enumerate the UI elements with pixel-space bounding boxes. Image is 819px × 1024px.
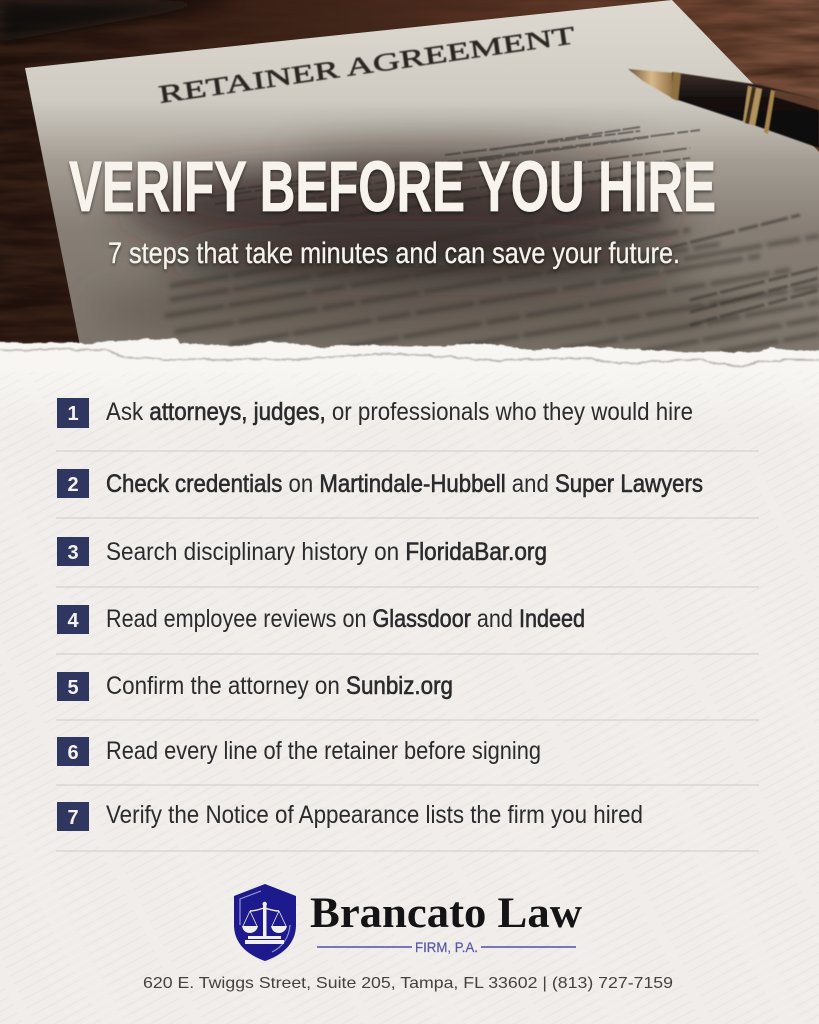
step 5: Confirm the attorney on Sunbiz.org (106, 672, 453, 700)
step 7: Verify the Notice of Appearance lists the firm you hired (106, 801, 643, 829)
wooden desk background (0, 0, 819, 356)
step 6: Read every line of the retainer before signing (106, 737, 541, 765)
step 1: Ask attorneys, judges, or professionals who they would hire (106, 398, 693, 426)
document text lines (165, 127, 819, 352)
torn paper edge (0, 338, 819, 372)
step 7: 7 (67, 807, 79, 829)
panel: lower paper with steps (0, 349, 819, 1024)
step 4: Read employee reviews on Glassdoor and Indeed (106, 605, 585, 633)
step 5: 5 (67, 677, 79, 699)
step 2: Check credentials on Martindale-Hubbell and Super Lawyers (106, 470, 703, 498)
step 6: 6 (67, 742, 79, 764)
firm subtitle with rules: FIRM, P.A. (415, 939, 478, 955)
panel: hero photo of retainer agreement (0, 0, 819, 356)
address and phone: 620 E. Twiggs Street, Suite 205, Tampa, FL 33602 | (813) 727-7159 (143, 975, 673, 992)
document heading: RETAINER AGREEMENT (157, 22, 577, 109)
step 4: 4 (67, 610, 79, 632)
subtitle: 7 steps that take minutes and can save your future. (108, 237, 680, 270)
step 3: Search disciplinary history on FloridaBar.org (106, 538, 547, 566)
step 3: 3 (67, 542, 79, 564)
blurred dark area behind the title (90, 140, 750, 340)
firm name: Brancato Law (310, 890, 582, 937)
step 2: 2 (67, 474, 79, 496)
fountain pen (628, 69, 819, 148)
icon: shield logo with scales (234, 884, 296, 961)
retainer document sheet (25, 0, 819, 356)
step 1: 1 (67, 403, 79, 425)
